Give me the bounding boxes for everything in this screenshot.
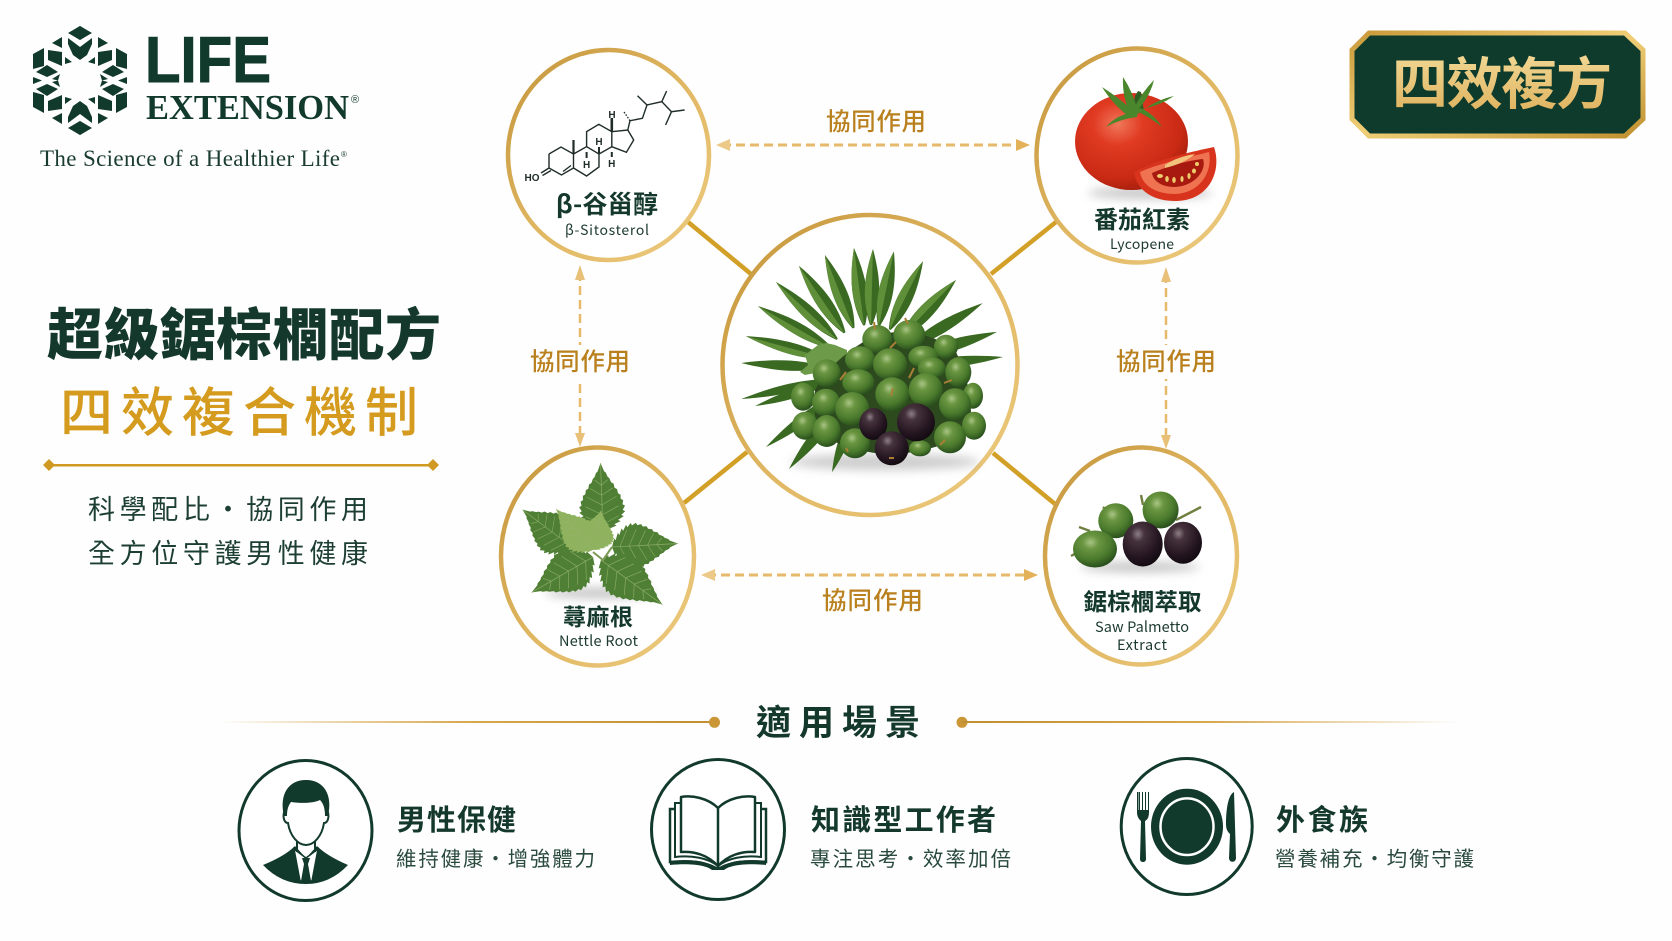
- tomato shadow: [1088, 187, 1212, 199]
- young light leaves: [543, 497, 619, 562]
- section header text: 適用場景: [756, 695, 920, 746]
- synergy arrow: left: [528, 265, 634, 447]
- synergy arrow: right: [1114, 267, 1220, 449]
- slice chamber: [1152, 159, 1204, 187]
- nettle leaves: [509, 462, 679, 623]
- molecule atom labels: H: [583, 160, 590, 171]
- synergy text right: 協同作用: [1116, 343, 1216, 378]
- molecule atom labels: [524, 110, 616, 184]
- scenario title: 知識型工作者: [811, 797, 996, 839]
- slice flesh: [1140, 152, 1210, 194]
- ingredient english name: Lycopene: [1110, 234, 1174, 254]
- ingredient circle: lycopene: [1036, 48, 1238, 262]
- frond highlights: [744, 248, 956, 364]
- ingredient circle: beta-sitosterol: [508, 50, 709, 260]
- scenario description: 維持健康・增強體力: [396, 842, 595, 872]
- tagline registered mark: ®: [341, 150, 347, 159]
- slice pith: [1165, 154, 1195, 168]
- scenario description: 營養補充・均衡守護: [1275, 842, 1474, 872]
- heading block: [43, 291, 441, 571]
- description line 1: 科學配比・協同作用: [88, 488, 368, 527]
- ingredient circle: nettle root: [501, 448, 694, 666]
- connector lines: [684, 222, 1056, 504]
- logo wordmark LIFE: LIFE: [145, 23, 271, 96]
- synergy arrow: bottom: [701, 569, 1038, 617]
- icon: plate and cutlery: [1121, 758, 1252, 894]
- badge: 四效複方: [1352, 33, 1643, 136]
- slice seeds: [1157, 162, 1199, 183]
- scenario: dining out: [1121, 758, 1474, 894]
- berries shadow: [1080, 562, 1200, 572]
- molecule diagram: [541, 91, 685, 176]
- synergy text left: 協同作用: [530, 343, 630, 378]
- english name line 1: Saw Palmetto: [1095, 616, 1189, 637]
- scenario title: 外食族: [1276, 797, 1368, 839]
- molecule atom labels: H: [608, 110, 616, 121]
- section header: 適用場景: [217, 695, 1458, 746]
- icon: open book: [652, 760, 784, 900]
- synergy label top: 協同作用: [826, 103, 926, 138]
- ingredient english name: Nettle Root: [559, 630, 639, 651]
- subtitle: 四效複合機制: [60, 371, 418, 447]
- logo wordmark EXTENSION: EXTENSION: [146, 88, 349, 127]
- registered mark: ®: [351, 94, 359, 106]
- shaded gap behind berries: [815, 332, 971, 455]
- molecule atom labels: H: [608, 159, 615, 170]
- divider with diamonds: [43, 459, 439, 471]
- molecule atom labels: H: [595, 137, 603, 148]
- logo tagline: The Science of a Healthier Life: [40, 146, 340, 171]
- tomato body: [1075, 93, 1188, 190]
- tomato stem: [1132, 91, 1144, 112]
- small leaf behind berries: [800, 343, 847, 375]
- dark berries: [859, 403, 935, 465]
- extract berries: [1073, 492, 1202, 568]
- synergy arrow: top: [716, 103, 1030, 151]
- main title: 超級鋸棕櫚配方: [47, 291, 441, 372]
- green berries: [791, 320, 986, 458]
- ingredient name: 番茄紅素: [1094, 200, 1190, 235]
- icon: businessman: [239, 760, 372, 900]
- leaf stems: [593, 547, 612, 560]
- berry shadow: [790, 454, 980, 470]
- berry stems: [840, 318, 952, 458]
- ingredient name: 蕁麻根: [563, 598, 633, 632]
- berry stems: [1071, 495, 1201, 556]
- tomato sepals: [1102, 77, 1174, 127]
- ingredient circle: saw palmetto extract: [1045, 448, 1237, 664]
- tomato slice: [1134, 147, 1216, 201]
- leaf shadow: [545, 588, 655, 598]
- center circle: saw palmetto: [722, 215, 1018, 515]
- icon: hexagon emblem: [33, 26, 127, 135]
- molecule atom labels: HO: [524, 173, 540, 184]
- description line 2: 全方位守護男性健康: [88, 532, 368, 571]
- scenario title: 男性保健: [397, 797, 516, 839]
- badge text: 四效複方: [1392, 40, 1612, 121]
- scenario: men's health: [239, 760, 595, 900]
- palm fronds: [740, 247, 1003, 474]
- english name line 2: Extract: [1117, 634, 1168, 655]
- scenario: knowledge workers: [652, 760, 1011, 900]
- ingredient english name: β-Sitosterol: [565, 220, 649, 240]
- synergy label right: [1114, 345, 1220, 379]
- logo: Life Extension: [33, 23, 359, 171]
- synergy label bottom: 協同作用: [822, 582, 923, 617]
- ingredient name: β-谷甾醇: [556, 185, 658, 221]
- scenario description: 專注思考・效率加倍: [810, 842, 1011, 872]
- synergy label left: [528, 345, 634, 379]
- ingredient name: 鋸棕櫚萃取: [1084, 583, 1202, 617]
